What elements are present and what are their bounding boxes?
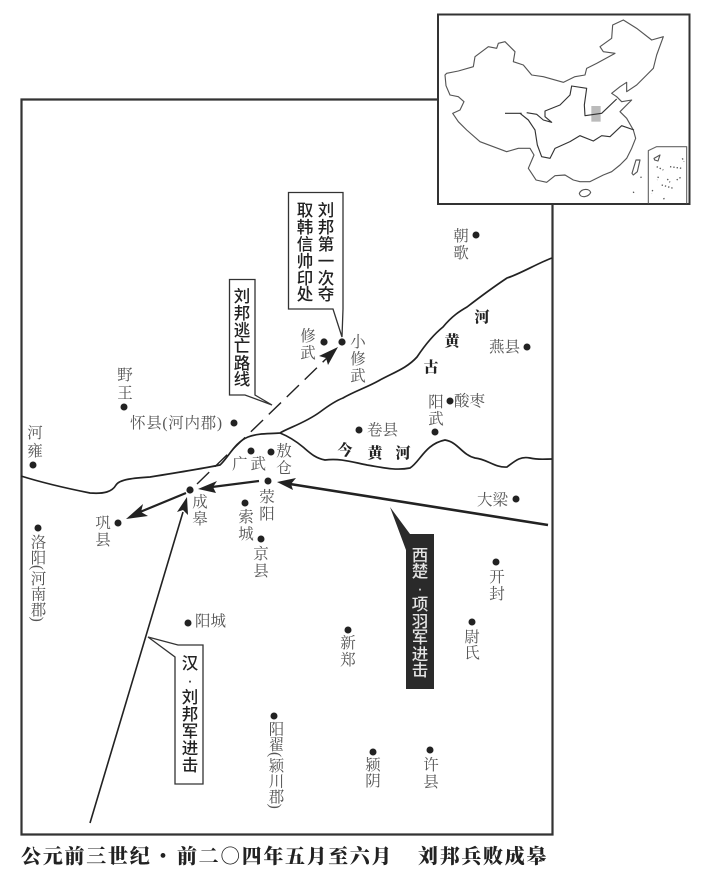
callout: Liu Bang escape route: 刘邦逃亡路线: [234, 287, 251, 389]
place: Gongxian: 巩县: [95, 514, 111, 549]
place: Suanzao: 酸枣: [454, 391, 485, 410]
place: Chenggao: [186, 486, 208, 528]
arrow: Liu Bang escape route: [197, 347, 338, 484]
Hainan: [579, 189, 591, 197]
South China Sea box: [648, 147, 687, 203]
place: Jingxian: 京县: [253, 545, 269, 580]
place: Zhaoge: 朝歌: [453, 227, 469, 262]
river label: modern Yellow River: 黄: [367, 444, 385, 462]
river label: modern Yellow River: 河: [395, 445, 411, 462]
callout: Western Chu Xiang Yu army advance: [390, 507, 434, 689]
modern Yellow River: [280, 433, 552, 469]
place: Huaixian: 怀县(河内郡): [130, 414, 222, 432]
arrow: Han army advance: [90, 497, 188, 823]
callout: first seizure of Han Xin's seal: [288, 192, 343, 337]
place: Yingyin: 颍阴: [365, 756, 381, 790]
title caption: date: 公元前三世纪・前二○四年五月至六月: [21, 840, 391, 869]
place: Xuxian: 许县: [423, 756, 439, 791]
river label: modern Yellow River: [337, 441, 411, 462]
place: Kaifeng: 开封: [489, 568, 505, 603]
callout: first seizure of Han Xin's seal: 取韩信帅印处: [297, 202, 314, 304]
China outline: [445, 20, 663, 182]
place: Juanxian: [356, 421, 398, 439]
highlighted region: [591, 106, 601, 122]
arrow: Chenggao to Gongxian: [126, 493, 186, 519]
panel: main map: [21, 100, 552, 834]
arrow: Xiang Yu advance to Xingyang: [277, 478, 548, 525]
river label: old Yellow River: 黄: [444, 332, 462, 350]
callout: first seizure of Han Xin's seal: 刘邦第一次夺: [318, 201, 334, 304]
river label: old Yellow River: 河: [474, 309, 490, 326]
place: Yangzhai: 阳翟(颍川郡): [266, 721, 284, 809]
place: Aocang: [268, 442, 292, 477]
place: Chenggao: 成皋: [192, 493, 208, 528]
callout: Western Chu Xiang Yu army advance: 西楚·项羽军进击: [412, 547, 428, 680]
place: Xinzheng: 新郑: [340, 634, 356, 669]
Taiwan: [632, 160, 640, 175]
place: Xingyang: 荥阳: [259, 488, 275, 523]
panel: China locator inset: [438, 14, 690, 204]
place: Yangcheng: 阳城: [195, 612, 227, 630]
place: Xiaoxiuwu: 小修武: [350, 333, 366, 385]
place: Xiuwu: [300, 327, 328, 362]
place: Guangwu: 广武: [232, 455, 266, 473]
Yellow River: [505, 86, 617, 122]
old Yellow River: [21, 258, 552, 493]
callout: Han Liu Bang army advance: [148, 637, 203, 784]
place: Xiaoxiuwu: [338, 333, 366, 385]
Yangtze River: [520, 113, 634, 158]
place: Yewang: 野王: [117, 366, 133, 402]
place: Aocang: 敖仓: [276, 442, 292, 477]
place: Yangwu: 阳武: [428, 393, 444, 428]
place: Gongxian: [95, 514, 122, 549]
place: Heyong: 河雍: [27, 424, 43, 460]
place: Yanxian: 燕县: [489, 338, 520, 356]
callout: Liu Bang escape route: [230, 280, 272, 405]
river label: old Yellow River: [423, 309, 490, 376]
callout: Han Liu Bang army advance: 汉·刘邦军进击: [182, 654, 199, 775]
place: Weishi: 尉氏: [464, 628, 480, 662]
place: Luoyang: 洛阳(河南郡): [28, 534, 46, 622]
place: Daliang: 大梁: [477, 490, 510, 509]
place: Suocheng: 索城: [238, 507, 254, 543]
place: Daliang: [477, 490, 520, 509]
place: Xiuwu: 修武: [300, 327, 316, 362]
title caption: Liu Bang defeated at Chenggao: 刘邦兵败成皋: [418, 840, 546, 869]
river label: old Yellow River: 古: [423, 358, 439, 376]
arrow: Xingyang to Chenggao: [198, 481, 259, 493]
river label: modern Yellow River: 今: [337, 441, 353, 459]
place: Zhaoge: [453, 227, 480, 262]
place: Guangwu: [232, 448, 266, 473]
place: Yangcheng: [184, 612, 227, 630]
place: Juanxian: 卷县: [367, 421, 398, 439]
